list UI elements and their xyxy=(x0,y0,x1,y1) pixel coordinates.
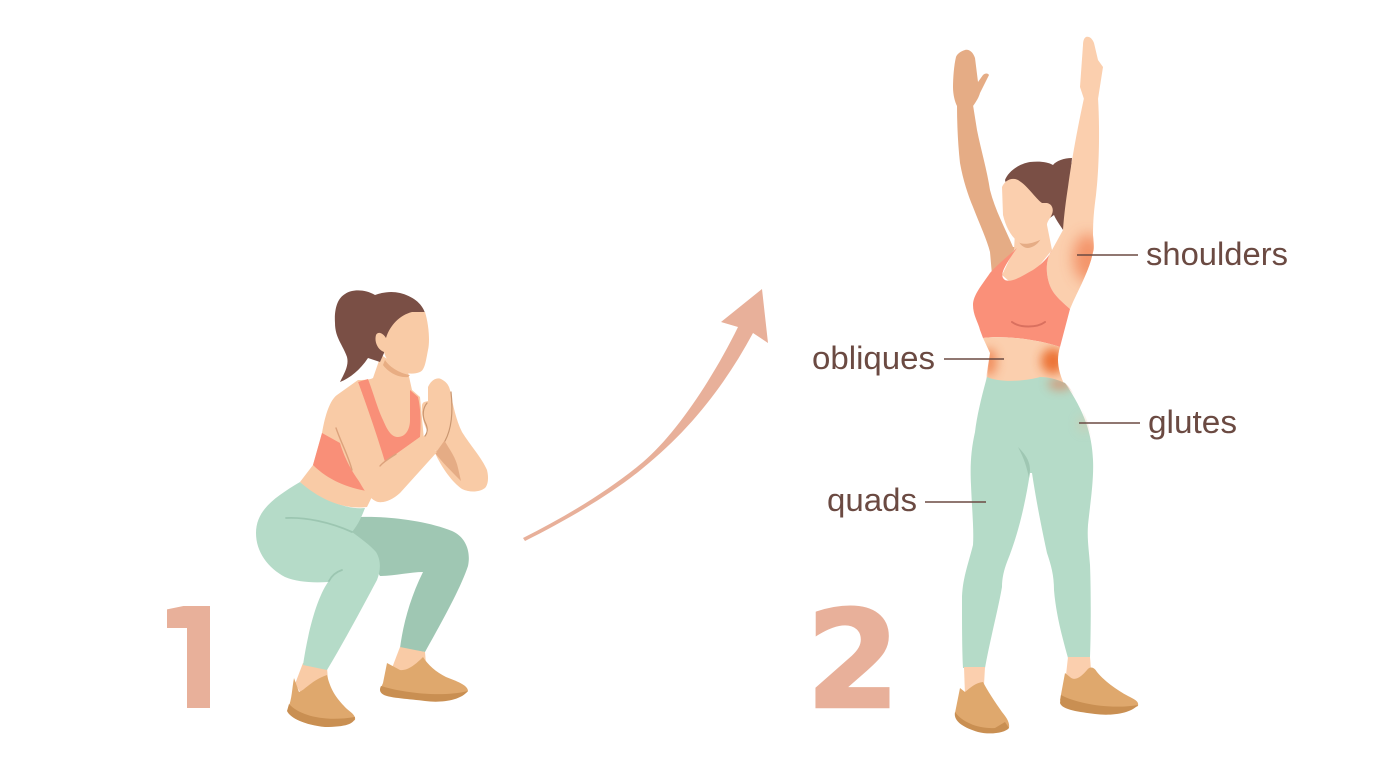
left shoe sole xyxy=(955,712,1009,733)
neck shadow xyxy=(383,360,410,377)
left shoe xyxy=(955,682,1009,732)
shoulder highlight xyxy=(1073,234,1103,282)
sports bra front xyxy=(358,379,421,462)
figure 1: squatting woman xyxy=(256,290,488,727)
figure 2: standing woman with arms raised xyxy=(953,37,1138,733)
near shoe sole xyxy=(287,704,355,727)
left ankle xyxy=(964,667,985,695)
torso xyxy=(300,355,424,508)
near leg (light leggings) xyxy=(256,482,380,670)
right shoe xyxy=(1060,668,1138,712)
head xyxy=(375,312,429,374)
raised arm (viewer left) xyxy=(957,105,1017,275)
hands xyxy=(420,378,452,451)
ponytail and hair xyxy=(1005,158,1072,233)
neck shadow xyxy=(1018,228,1043,248)
finger lines xyxy=(423,392,452,441)
label: shoulders: shoulders xyxy=(1146,236,1288,272)
leg crease xyxy=(1018,447,1030,478)
near arm xyxy=(336,382,437,502)
far ankle xyxy=(392,647,426,672)
head xyxy=(1002,179,1053,244)
label: quads: quads xyxy=(827,482,917,518)
leg crease xyxy=(286,518,352,581)
far shoe sole xyxy=(380,686,468,702)
neck xyxy=(1002,225,1052,282)
bra underline xyxy=(1012,322,1045,326)
oblique highlights xyxy=(981,348,1065,376)
right hand xyxy=(1080,37,1103,99)
midriff xyxy=(983,337,1066,388)
far leg (dark leggings) xyxy=(352,517,469,652)
sports bra xyxy=(973,248,1070,347)
near ankle xyxy=(295,663,328,695)
label: obliques: obliques xyxy=(812,340,935,376)
sports bra back panel xyxy=(313,433,367,491)
left hand xyxy=(953,50,989,106)
right shoe sole xyxy=(1060,695,1138,715)
arm crease xyxy=(336,428,396,470)
near shoe xyxy=(288,675,355,726)
ponytail and hair xyxy=(335,290,425,382)
number 2: 2 xyxy=(806,582,900,739)
number 1: 1 xyxy=(147,582,242,741)
far arm xyxy=(435,390,488,492)
far arm shadow xyxy=(435,440,461,481)
arrow xyxy=(523,289,768,541)
raised arm (viewer right) with shoulder xyxy=(1047,98,1099,309)
label: glutes: glutes xyxy=(1148,404,1237,440)
right ankle xyxy=(1066,657,1091,682)
glute highlight xyxy=(1048,378,1090,432)
leggings xyxy=(962,377,1093,668)
far shoe xyxy=(380,657,468,699)
